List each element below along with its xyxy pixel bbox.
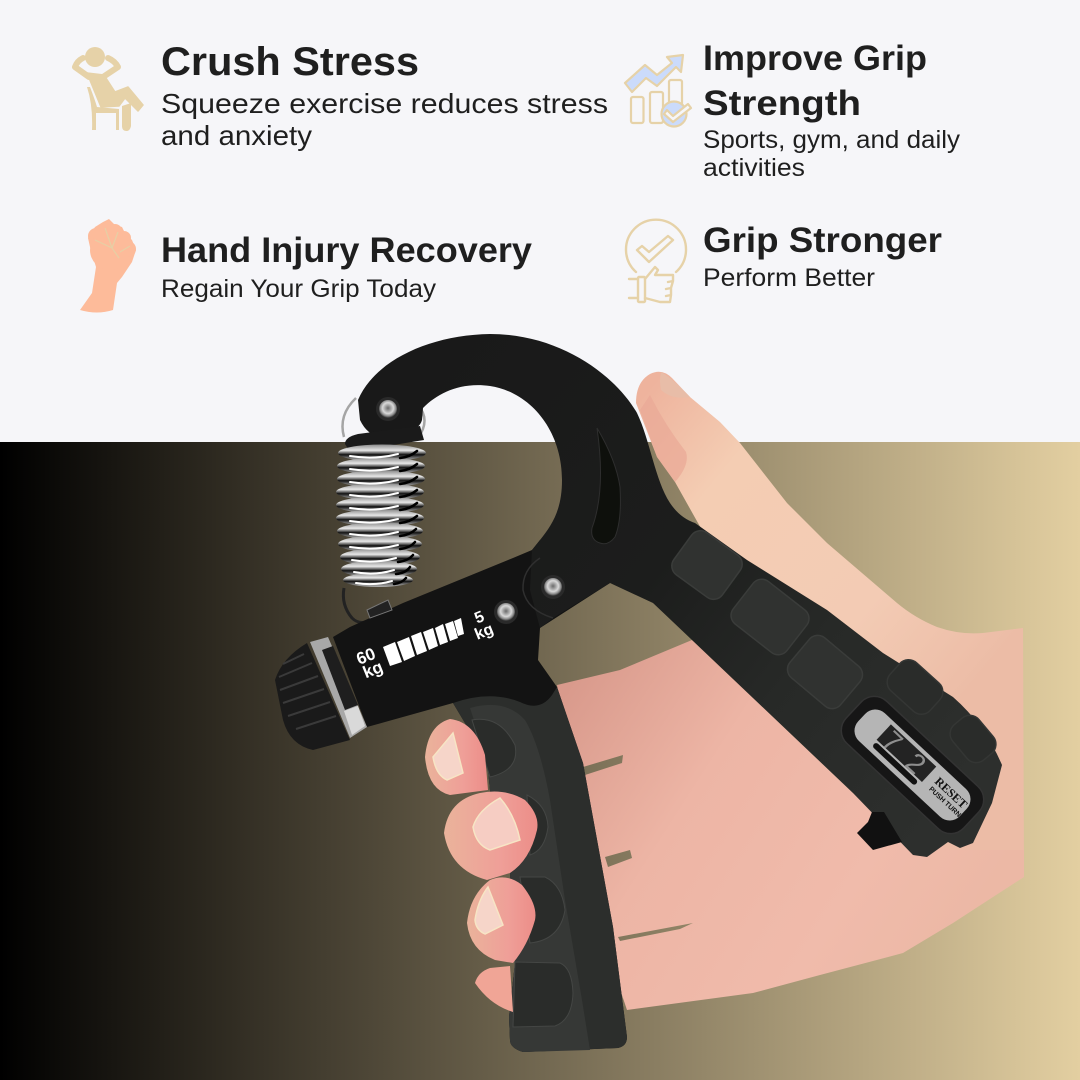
pivot plate outline — [523, 558, 553, 618]
screws — [376, 397, 565, 624]
scale label: sixty kg: kg — [360, 657, 386, 682]
gripper — [275, 334, 1002, 1052]
finger one — [425, 719, 488, 795]
scale label: five kg — [467, 607, 496, 644]
photo: hand holding the gripper — [557, 372, 1024, 1010]
handle finger dents — [472, 719, 573, 1027]
heading block: improve grip strength: Sports, gym, and daily — [703, 126, 961, 154]
scale label: sixty kg: 60 — [354, 644, 378, 669]
heading block: improve grip strength: activities — [703, 154, 805, 182]
finger two — [444, 792, 538, 880]
scale label: five kg: 5 — [472, 608, 487, 627]
display panel: 2 — [900, 747, 932, 780]
heading block: improve grip strength: Strength — [703, 84, 861, 123]
heading block: grip stronger: Grip Stronger — [703, 221, 942, 260]
heading block: grip stronger — [703, 221, 942, 292]
grip pads — [667, 526, 1001, 768]
icon: raised fist — [80, 219, 136, 312]
display panel: RESET — [932, 774, 970, 811]
hand: thumb and wrist — [636, 372, 1024, 900]
icon: thumbs up with check — [626, 220, 686, 302]
scale label: five kg: kg — [472, 621, 496, 644]
display panel — [834, 689, 991, 841]
finger four — [475, 966, 513, 1012]
adjustment knob — [275, 637, 367, 750]
fingernail three — [475, 887, 503, 934]
handle front panel — [470, 705, 590, 1052]
fingernail two — [473, 798, 520, 850]
scale label: sixty kg — [354, 643, 386, 683]
fingernail one — [433, 733, 463, 780]
spring cap — [345, 426, 424, 452]
finger three — [467, 877, 535, 963]
clip — [367, 600, 392, 618]
heading block: crush stress: Crush Stress — [161, 40, 419, 84]
head and long handle arm — [358, 334, 1002, 857]
thumb crease shade — [640, 395, 687, 482]
spring — [336, 444, 426, 587]
scale bars — [383, 618, 464, 666]
heading block: improve grip strength: Improve Grip — [703, 39, 927, 78]
heading block: crush stress: Squeeze exercise reduces stress — [161, 88, 608, 119]
heading block: crush stress: and anxiety — [161, 120, 312, 151]
spring loops — [342, 398, 424, 622]
display panel: 7 — [876, 725, 909, 758]
heading block: crush stress — [161, 40, 608, 151]
heading block: grip stronger: Perform Better — [703, 264, 875, 292]
display panel: PUSH TURN — [927, 786, 962, 819]
lever body — [333, 540, 627, 1052]
finger gaps — [583, 755, 693, 941]
heading block: hand injury recovery — [161, 231, 533, 303]
hand: palm and finger bases — [557, 640, 1024, 1010]
heading block: improve grip strength — [703, 39, 961, 182]
icon: relaxing person in chair — [75, 47, 143, 131]
fingertips in front of handle — [425, 719, 538, 1012]
heading block: hand injury recovery: Hand Injury Recovery — [161, 231, 533, 270]
heading block: hand injury recovery: Regain Your Grip Today — [161, 275, 437, 303]
neck slot — [592, 428, 620, 544]
handle panel — [453, 687, 627, 1052]
gradient background band — [0, 442, 1080, 1080]
thumbnail — [660, 372, 690, 398]
reset button — [857, 812, 902, 850]
icon: bar chart with arrow — [625, 55, 691, 126]
